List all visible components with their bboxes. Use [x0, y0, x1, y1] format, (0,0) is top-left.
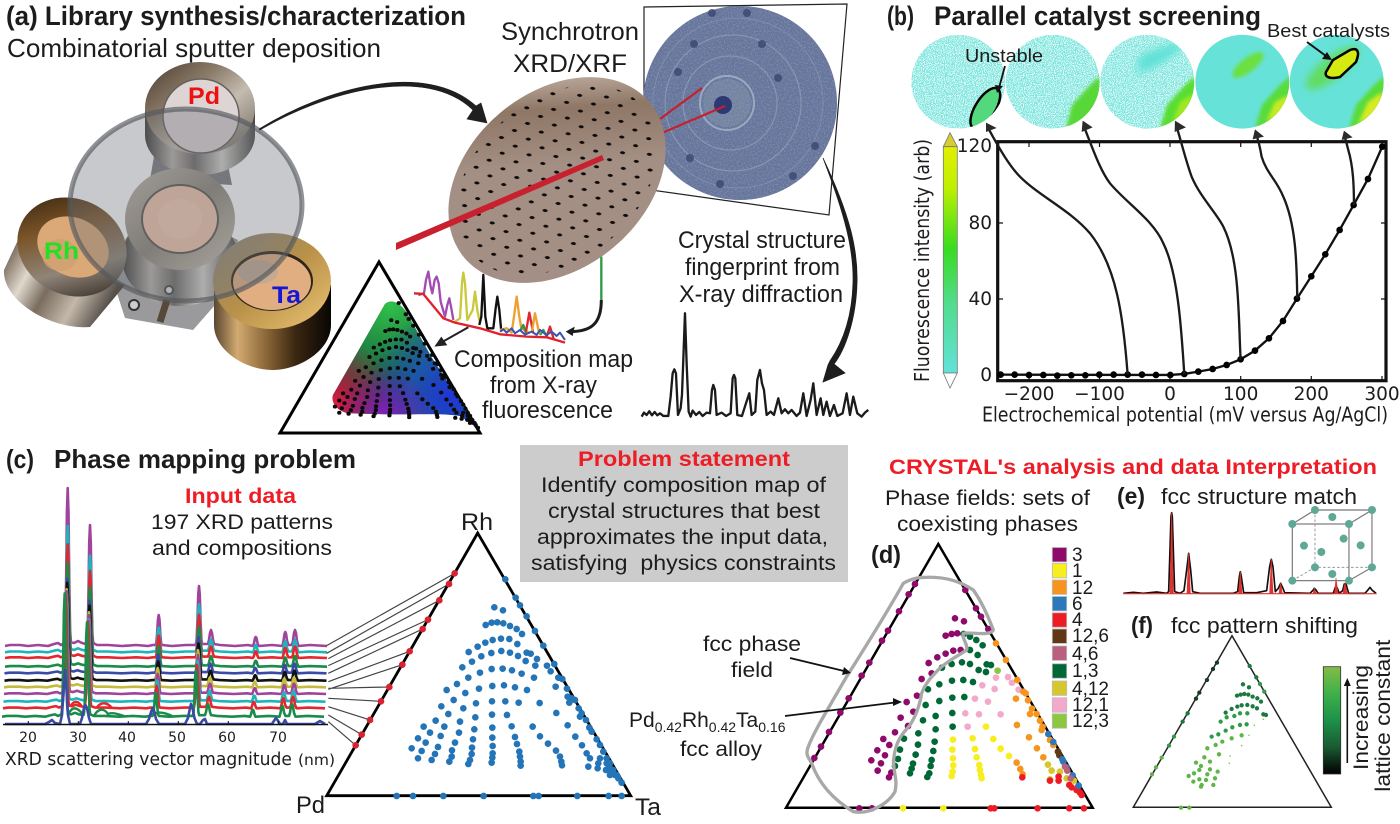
legend: phase sets: 3: [1072, 545, 1083, 566]
arrow: sputter guns to wafer: [259, 82, 487, 130]
label: fcc phase field: [703, 633, 801, 682]
label: Ta: Ta: [272, 282, 302, 309]
line chart frame and axes: [957, 136, 1400, 405]
line chart frame and axes: 0: [980, 365, 992, 386]
axis title: fluorescence intensity: Fluorescence intensity (arb): [910, 139, 934, 382]
text: synchrotron XRD/XRF: Synchrotron: [501, 18, 639, 46]
detector frame and image: [643, 4, 847, 215]
line chart frame and axes: 200: [1294, 384, 1329, 405]
panel d: phase fields: [629, 487, 1109, 812]
arrow: Unstable: [995, 66, 1005, 93]
legend: phase sets: 12,1: [1072, 695, 1109, 716]
text: crystal structure fingerprint: fingerprint from: [685, 254, 840, 281]
XRF detector line and arrow: [566, 257, 601, 336]
input data description: and compositions: [152, 537, 332, 560]
text: crystal structure fingerprint: Crystal structure: [678, 227, 846, 254]
lattice constant colour bar: [1323, 667, 1341, 774]
problem statement heading: Problem statement: [578, 448, 790, 471]
outlined best catalyst region: [1326, 49, 1358, 78]
heading: panel c title: Phase mapping problem: [54, 444, 356, 474]
problem statement text: crystal structures that best: [548, 500, 820, 523]
panel f label: (f): [1131, 612, 1153, 638]
x axis line and tick labels: 60: [218, 730, 236, 746]
polarization curve with data points: [1001, 147, 1382, 376]
legend: phase sets: 6: [1072, 594, 1083, 615]
legend: phase sets: 1: [1072, 561, 1083, 582]
line chart frame and axes: 300: [1364, 384, 1400, 405]
text: composition map from X-ray fluorescence: from X-ray: [490, 372, 597, 399]
axis label: increasing lattice constant: Increasing: [1350, 665, 1373, 770]
label: fcc alloy composition: fcc alloy: [680, 738, 763, 761]
label: fcc alloy composition: Rh: [682, 709, 709, 732]
legend: phase sets: 12: [1072, 578, 1093, 599]
label: fcc phase field: fcc phase: [703, 633, 801, 656]
ternary composition plot: [296, 509, 662, 821]
panel f title: fcc pattern shifting: [1171, 613, 1358, 638]
panel c: phase mapping problem: [2, 444, 662, 821]
axis title: XRD scattering vector magnitude: (nm): [298, 751, 335, 769]
wafer library with sample dots: [408, 35, 706, 325]
photo: sputter guns with translucent wafer: [1, 62, 331, 370]
legend: phase sets: 12,6: [1072, 626, 1109, 647]
line chart frame and axes: 0: [1164, 384, 1176, 405]
legend: phase sets: [1052, 545, 1109, 732]
curved arrows: data points to fluorescence discs: [986, 121, 1354, 375]
fcc unit cell: [1288, 506, 1376, 585]
heading: panel a title: (a) Library synthesis/characterization: [6, 1, 466, 31]
connector lines: patterns to composition points: [327, 573, 455, 745]
phase fields description: [885, 487, 1090, 536]
label: fcc alloy composition: 0.42: [655, 719, 682, 735]
panel f: fcc pattern shifting: [1131, 612, 1395, 808]
colour bar: [943, 133, 957, 388]
legend: phase sets: 12,3: [1072, 711, 1109, 732]
phase fields description: coexisting phases: [897, 513, 1078, 536]
x axis line and tick labels: 20: [19, 730, 37, 746]
panel b: parallel catalyst screening: [887, 1, 1400, 426]
x axis line and tick labels: 70: [269, 730, 287, 746]
problem statement text: [531, 474, 836, 575]
heading: panel c label: (c): [6, 444, 34, 474]
XRD fingerprint spectrum: [642, 313, 868, 417]
label: Pd: Pd: [188, 83, 220, 110]
arrow: increasing lattice constant: [1344, 678, 1351, 763]
label: Best catalysts: Best catalysts: [1267, 20, 1390, 41]
text: composition map from X-ray fluorescence: Composition map: [454, 346, 633, 373]
center sputter gun: [125, 168, 235, 270]
legend: phase sets: 4,12: [1072, 679, 1109, 700]
ternary triangle f: [1133, 636, 1331, 807]
fluorescence disc 3: [1100, 35, 1198, 129]
label: fcc alloy composition: 0.42: [709, 719, 736, 735]
line chart frame and axes: −200: [1004, 384, 1054, 405]
label: fcc alloy composition: Ta: [736, 709, 759, 732]
vertex label Ta: Ta: [635, 794, 662, 821]
x axis line and tick labels: 30: [69, 730, 87, 746]
legend: phase sets: 4,6: [1072, 644, 1098, 665]
input data description: [151, 511, 333, 560]
legend: phase sets: 4: [1072, 610, 1083, 631]
arrow: fcc phase field: [790, 658, 851, 675]
text: synchrotron XRD/XRF: XRD/XRF: [513, 50, 627, 78]
Pd sputter gun: [145, 62, 255, 175]
input data title: Input data: [185, 485, 296, 508]
line chart frame and axes: 40: [968, 289, 992, 310]
arrow: Best catalysts: [1307, 42, 1332, 60]
label: fcc alloy composition: [629, 709, 786, 761]
arrow: XRF spectrum to composition map: [434, 327, 468, 347]
axis label: increasing lattice constant: [1350, 640, 1395, 792]
Rh sputter gun: [1, 180, 143, 327]
x axis line and tick labels: [3, 721, 328, 746]
axis title: XRD scattering vector magnitude: XRD scattering vector magnitude: [5, 749, 292, 770]
x axis line and tick labels: 40: [118, 730, 136, 746]
line chart frame and axes: −100: [1074, 384, 1125, 405]
problem statement text: Identify composition map of: [541, 474, 826, 497]
line chart frame and axes: 100: [1223, 384, 1258, 405]
Ta sputter gun: [213, 233, 331, 370]
phase fields description: Phase fields: sets of: [885, 487, 1090, 510]
phase dots: [814, 584, 1084, 808]
panel e title: fcc structure match: [1161, 484, 1357, 509]
text: composition map from X-ray fluorescence: [454, 346, 633, 424]
composition triangle with colour map: [280, 262, 480, 433]
panel e: fcc structure match: [1117, 483, 1377, 594]
red incident X-ray beam: [396, 155, 604, 250]
arrow: fcc alloy: [785, 698, 902, 716]
panel e label: (e): [1117, 483, 1145, 509]
fluorescence disc 4: [1195, 35, 1293, 129]
stacked XRD patterns: [2, 488, 328, 746]
label: Unstable: Unstable: [965, 45, 1043, 66]
label: fcc alloy composition: Pd: [629, 709, 655, 732]
axis label: increasing lattice constant: lattice constant: [1372, 640, 1395, 792]
label: fcc alloy composition: 0.16: [758, 719, 786, 735]
text: crystal structure fingerprint: [678, 227, 846, 308]
arrow: diffraction image to fingerprint: [823, 158, 857, 382]
translucent wafer disc: [70, 109, 302, 301]
fluorescence disc 5: [1290, 35, 1387, 129]
text: composition map from X-ray fluorescence: fluorescence: [482, 397, 613, 424]
panel d label: (d): [871, 541, 901, 569]
text: synchrotron XRD/XRF: [501, 18, 639, 78]
matched XRD pattern: [1123, 513, 1377, 594]
fluorescence disc 1: [911, 35, 1006, 133]
vertex label Pd: Pd: [296, 792, 325, 819]
vertex label Rh: Rh: [461, 509, 493, 536]
panel a: library synthesis and characterization: [1, 1, 868, 433]
label: Rh: Rh: [44, 238, 79, 265]
problem statement text: satisfying physics constraints: [531, 552, 836, 575]
XRF spectrum: [414, 272, 565, 343]
text: crystal structure fingerprint: X-ray diffraction: [679, 281, 843, 308]
ternary triangle d: [786, 544, 1093, 808]
grey outline: fcc phase field: [807, 577, 993, 812]
problem statement box: [520, 445, 848, 582]
heading: panel b title: Parallel catalyst screening: [934, 1, 1261, 31]
label: fcc phase field: field: [731, 659, 773, 682]
lattice constant dots: [1152, 663, 1266, 808]
fluorescence disc 2: [1006, 35, 1103, 129]
red diffracted beams: [660, 88, 725, 133]
subheading: combinatorial sputter deposition: Combinatorial sputter deposition: [7, 33, 381, 63]
legend: phase sets: 1,3: [1072, 661, 1098, 682]
problem statement text: approximates the input data,: [537, 526, 828, 549]
line chart frame and axes: 80: [968, 213, 992, 234]
line chart frame and axes: 120: [957, 136, 992, 157]
heading: CRYSTAL's analysis: CRYSTAL's analysis and data Interpretation: [889, 456, 1377, 479]
x axis line and tick labels: 50: [168, 730, 186, 746]
input data description: 197 XRD patterns: [151, 511, 333, 534]
heading: panel b label: (b): [887, 1, 914, 31]
